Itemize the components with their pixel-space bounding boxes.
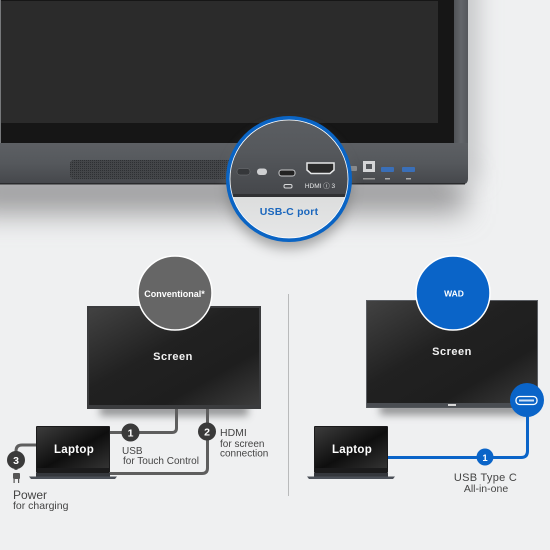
HDMI port icon: HDMI ⓘ 3 (305, 182, 336, 190)
badge: Conventional (138, 256, 212, 330)
label: USB: USB (122, 446, 143, 457)
lens label: USB-C port (260, 206, 319, 218)
step 1 (476, 448, 494, 466)
laptop (307, 426, 395, 479)
label: HDMI: for screen (220, 439, 264, 450)
label: HDMI: HDMI (220, 427, 247, 439)
label: USB Type C: All-in-one (464, 483, 508, 495)
magnifier lens: USB-C port (220, 110, 360, 249)
label: USB Type C: USB Type C (454, 472, 517, 484)
label: USB (122, 446, 199, 467)
label: HDMI: connection (220, 448, 268, 460)
badge: WAD: WAD (444, 288, 464, 298)
screen: WAD: Screen (432, 346, 472, 358)
label: Power: Power (13, 488, 47, 502)
USB-C port icon (279, 170, 295, 188)
divider (288, 294, 289, 496)
icon: USB-C port (510, 383, 544, 417)
label: HDMI (220, 427, 268, 460)
step 1: 1 (482, 453, 488, 464)
step 1: 1 (128, 428, 134, 440)
step 1 (122, 424, 140, 442)
panel: conventional (7, 256, 268, 512)
panel: WAD (307, 256, 544, 495)
speaker grille (70, 160, 235, 179)
laptop: Laptop (332, 444, 372, 456)
cables (16, 409, 208, 474)
top display close-up (0, 0, 468, 184)
laptop: Laptop (54, 444, 94, 456)
step 2 (198, 422, 216, 440)
badge: Conventional: Conventional* (144, 289, 205, 299)
lens ring (228, 118, 350, 240)
label: USB: for Touch Control (123, 456, 199, 467)
side ports (350, 161, 415, 180)
label: USB Type C (454, 472, 517, 495)
screen: conventional: Screen (153, 351, 193, 363)
label: Power: for charging (13, 500, 69, 512)
screen: conventional (87, 306, 261, 416)
laptop (29, 426, 117, 479)
step 3: 3 (13, 455, 19, 467)
label: Power (13, 488, 69, 512)
step 2: 2 (204, 426, 210, 438)
screen: WAD (366, 300, 538, 415)
step 3 (7, 451, 25, 469)
cable: USB Type C (388, 410, 528, 458)
icon: power plug (13, 473, 20, 483)
button icons (237, 168, 267, 175)
badge: WAD (416, 256, 490, 330)
top display shadow (0, 0, 480, 214)
